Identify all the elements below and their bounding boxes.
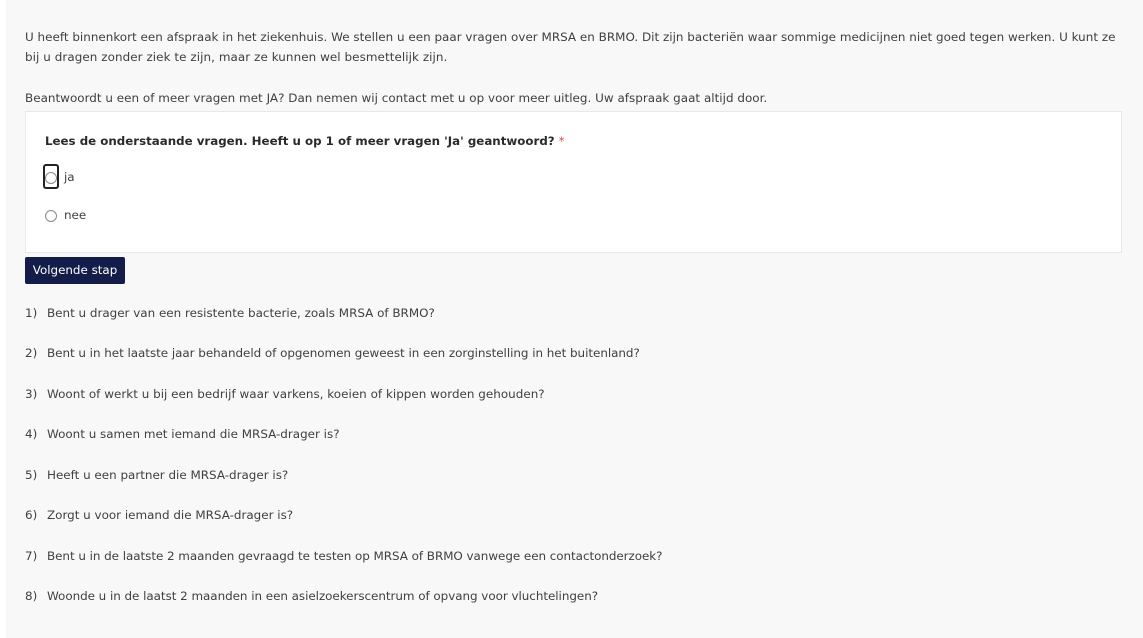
question 7: 7) — [25, 549, 37, 563]
question 2: Bent u in het laatste jaar behandeld of opgenomen geweest in een zorginstelling in het buitenland? — [47, 346, 640, 360]
question 6: Zorgt u voor iemand die MRSA-drager is? — [47, 508, 293, 522]
focus ring with radio — [43, 164, 59, 189]
intro text: U heeft binnenkort een afspraak in het ziekenhuis. We stellen u een paar vragen over MRSA en BRMO. Dit zijn bacteriën waar sommige medicijnen niet goed tegen werken. U kunt ze — [25, 30, 1115, 44]
question list — [25, 306, 662, 603]
button: volgende stap: Volgende stap — [33, 263, 117, 277]
radio circle — [45, 172, 57, 184]
radio circle — [45, 210, 57, 222]
panel: question form — [25, 111, 1122, 253]
question 4: Woont u samen met iemand die MRSA-drager is? — [47, 427, 340, 441]
question 4: 4) — [25, 427, 37, 441]
radio option: nee — [45, 208, 86, 222]
intro text: bij u dragen zonder ziek te zijn, maar ze kunnen wel besmettelijk zijn. — [25, 50, 447, 64]
intro text — [25, 30, 1115, 64]
question 1: Bent u drager van een resistente bacterie, zoals MRSA of BRMO? — [47, 306, 435, 320]
label nee: nee — [64, 208, 86, 222]
button: volgende stap — [25, 257, 125, 284]
radio option: ja — [43, 164, 75, 189]
question 1: 1) — [25, 306, 37, 320]
instruction text: Beantwoordt u een of meer vragen met JA? Dan nemen wij contact met u op voor meer uitleg. Uw afspraak gaat altijd door. — [25, 91, 767, 105]
question 3: Woont of werkt u bij een bedrijf waar varkens, koeien of kippen worden gehouden? — [47, 387, 545, 401]
question 3: 3) — [25, 387, 37, 401]
question 5: Heeft u een partner die MRSA-drager is? — [47, 468, 288, 482]
label ja: ja — [64, 170, 75, 184]
question 8: 8) — [25, 589, 37, 603]
question heading: Lees de onderstaande vragen. Heeft u op 1 of meer vragen 'Ja' geantwoord? * — [45, 134, 565, 148]
question 5: 5) — [25, 468, 37, 482]
question 6: 6) — [25, 508, 37, 522]
question 8: Woonde u in de laatst 2 maanden in een asielzoekerscentrum of opvang voor vluchtelingen? — [47, 589, 598, 603]
question 2: 2) — [25, 346, 37, 360]
question 7: Bent u in de laatste 2 maanden gevraagd te testen op MRSA of BRMO vanwege een contactonderzoek? — [47, 549, 662, 563]
